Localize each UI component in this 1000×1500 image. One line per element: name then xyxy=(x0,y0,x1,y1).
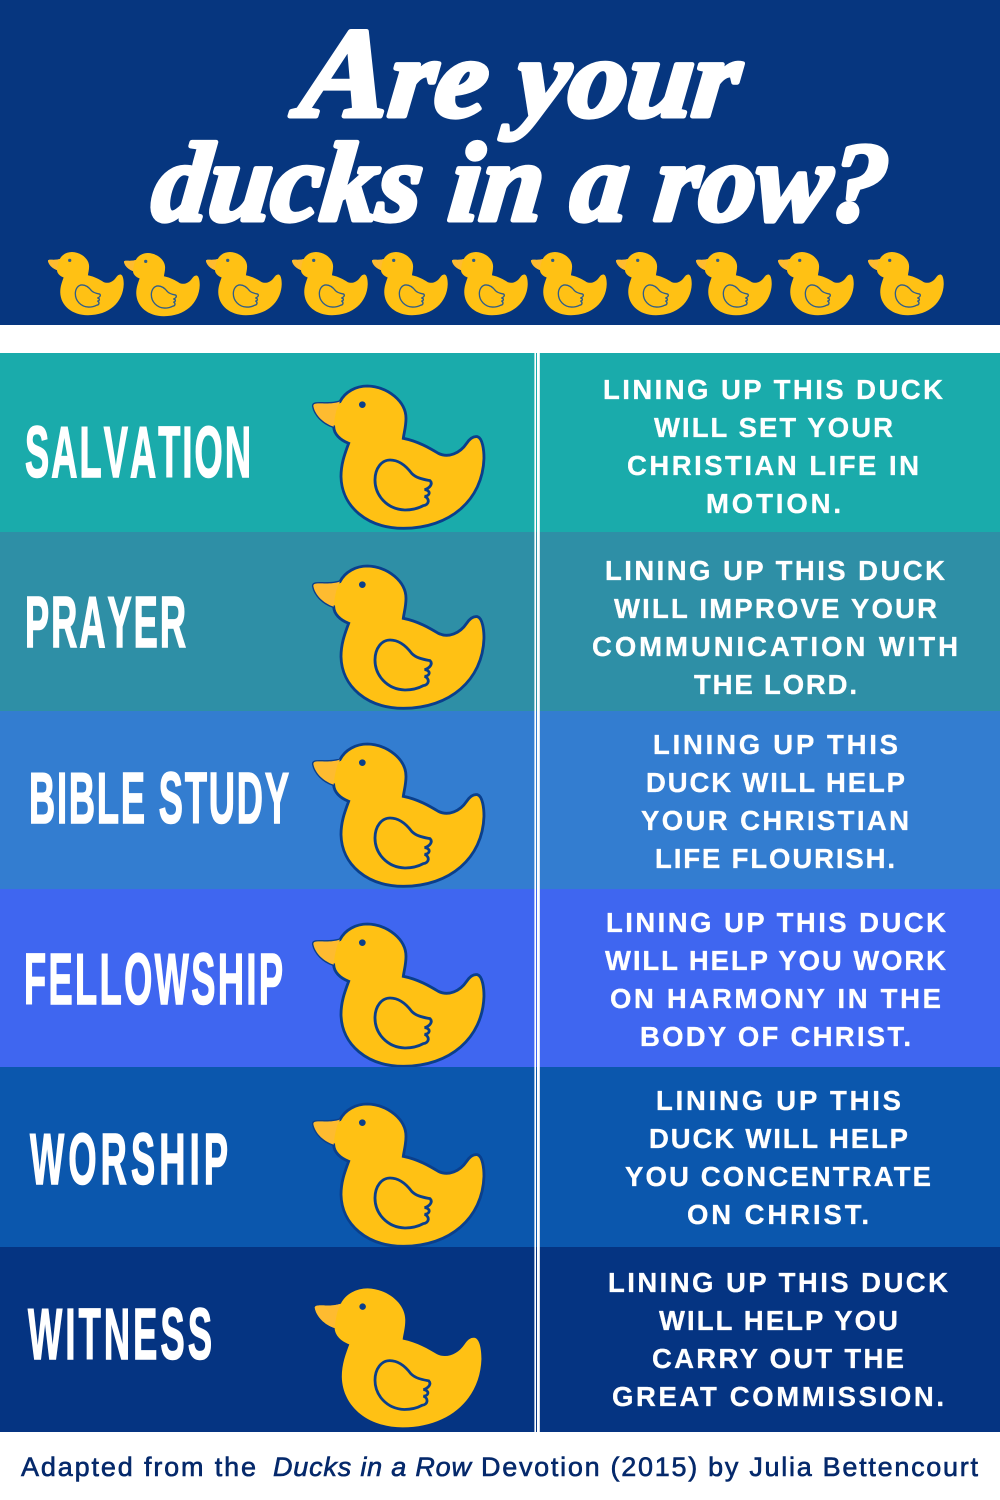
title: ducks in a row? xyxy=(147,121,894,245)
footer credit: Adapted from the xyxy=(21,1452,256,1482)
text: worship description: LINING UP THIS xyxy=(656,1085,901,1116)
panel: fellowship xyxy=(0,889,1000,1067)
label: prayer: PRAYER xyxy=(25,582,186,663)
text: prayer description xyxy=(592,555,958,700)
label: bible study: BIBLE STUDY xyxy=(29,758,289,839)
icon: duck xyxy=(313,1104,484,1246)
label: salvation: SALVATION xyxy=(25,412,251,493)
text: worship description: DUCK WILL HELP xyxy=(649,1123,908,1154)
text: witness description: WILL HELP YOU xyxy=(659,1305,898,1336)
panel: salvation xyxy=(0,353,1000,532)
text: fellowship description: BODY OF CHRIST. xyxy=(640,1021,911,1052)
text: bible study description: DUCK WILL HELP xyxy=(646,767,905,798)
text: prayer description: COMMUNICATION WITH xyxy=(592,631,958,662)
text: prayer description: THE LORD. xyxy=(694,669,857,700)
text: bible study description: LIFE FLOURISH. xyxy=(655,843,895,874)
row of small ducks xyxy=(48,252,944,316)
text: bible study description xyxy=(641,729,909,874)
label: worship: WORSHIP xyxy=(30,1119,228,1200)
text: witness description: GREAT COMMISSION. xyxy=(612,1381,944,1412)
text: fellowship description xyxy=(605,907,946,1052)
text: prayer description: LINING UP THIS DUCK xyxy=(605,555,945,586)
text: bible study description: LINING UP THIS xyxy=(653,729,898,760)
text: salvation description: MOTION. xyxy=(706,488,841,519)
label: fellowship: FELLOWSHIP xyxy=(24,939,283,1020)
icon: duck xyxy=(315,1288,481,1427)
icon: duck xyxy=(313,566,484,708)
text: salvation description: CHRISTIAN LIFE IN xyxy=(627,450,919,481)
text: worship description: ON CHRIST. xyxy=(687,1199,869,1230)
panel: header xyxy=(0,0,1000,325)
text: salvation description xyxy=(603,374,943,519)
text: witness description: CARRY OUT THE xyxy=(652,1343,904,1374)
text: bible study description: YOUR CHRISTIAN xyxy=(641,805,909,836)
footer credit: Devotion (2015) by Julia Bettencourt xyxy=(481,1452,978,1482)
text: witness description: LINING UP THIS DUCK xyxy=(608,1267,948,1298)
panel: bible study xyxy=(0,711,1000,889)
text: worship description xyxy=(625,1085,931,1230)
footer credit xyxy=(21,1452,978,1482)
panel: witness xyxy=(0,1247,1000,1432)
label: witness: WITNESS xyxy=(28,1294,212,1375)
text: worship description: YOU CONCENTRATE xyxy=(625,1161,931,1192)
text: fellowship description: WILL HELP YOU WORK xyxy=(605,945,946,976)
icon: duck xyxy=(313,744,484,886)
title xyxy=(147,2,894,245)
footer credit: Ducks in a Row xyxy=(273,1452,472,1482)
text: fellowship description: ON HARMONY IN THE xyxy=(610,983,941,1014)
text: prayer description: WILL IMPROVE YOUR xyxy=(614,593,937,624)
icon: duck xyxy=(313,386,484,528)
panel: worship xyxy=(0,1067,1000,1247)
text: fellowship description: LINING UP THIS DUCK xyxy=(606,907,946,938)
text: witness description xyxy=(608,1267,948,1412)
panel: prayer xyxy=(0,532,1000,711)
text: salvation description: WILL SET YOUR xyxy=(654,412,893,443)
icon: duck xyxy=(313,924,484,1066)
text: salvation description: LINING UP THIS DUCK xyxy=(603,374,943,405)
title: Are your xyxy=(287,2,749,144)
